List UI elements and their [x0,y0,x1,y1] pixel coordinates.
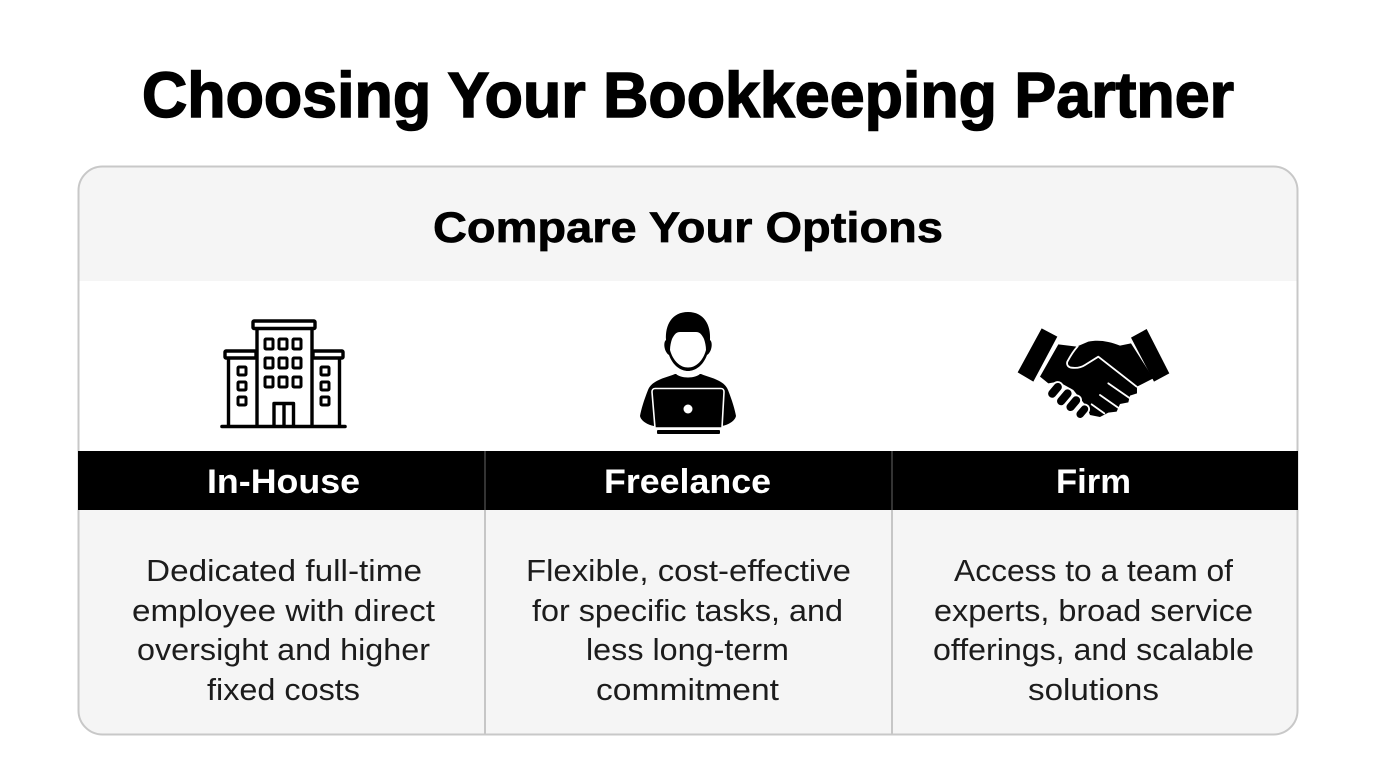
header: In-House: In-House [207,463,360,501]
text: In-House description: fixed costs [207,672,360,707]
text: Freelance description: Flexible, cost-effective [526,553,851,588]
text: Firm description: Access to a team of [954,553,1233,588]
icon: person with laptop [640,312,736,434]
text: Freelance description: less long-term [586,632,789,667]
text: Freelance description: for specific tasks, and [532,593,843,628]
text: Firm description: solutions [1028,672,1159,707]
header: Freelance: Freelance [604,463,771,501]
text: Firm description [933,553,1254,707]
text: Firm description: experts, broad service [934,593,1253,628]
text: In-House description: Dedicated full-time [146,553,422,588]
header: Firm: Firm [1056,463,1131,501]
text: Freelance description: commitment [596,672,779,707]
text: In-House description [132,553,435,707]
icon: handshake [1018,328,1169,421]
panel heading: Compare Your Options [433,204,943,252]
title: Choosing Your Bookkeeping Partner [142,59,1234,131]
column headers [207,463,1131,501]
text: Freelance description [526,553,851,707]
text: In-House description: employee with direct [132,593,435,628]
icon: office building [222,321,345,426]
text: In-House description: oversight and higher [137,632,430,667]
text: Firm description: offerings, and scalable [933,632,1254,667]
comparison table panel [78,166,1298,735]
